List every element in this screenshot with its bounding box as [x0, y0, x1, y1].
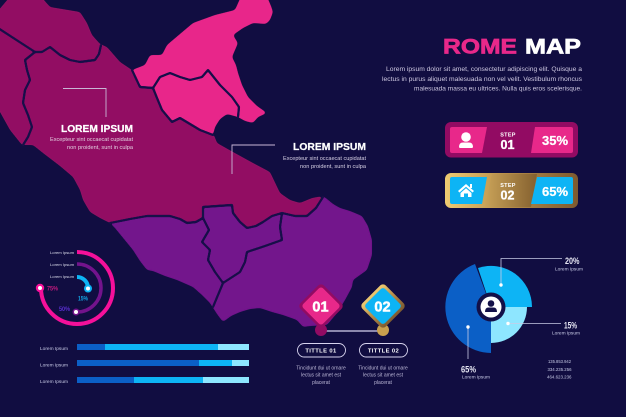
radial chart labels: 15%	[78, 296, 89, 302]
intro text: Lorem ipsum dolor sit amet, consectetur adipiscing elit. Quisque a	[386, 67, 583, 73]
icon: house	[458, 184, 474, 197]
pie label 20%	[499, 256, 583, 287]
marker 01: 01	[312, 300, 329, 316]
map area: magenta centre	[0, 0, 323, 228]
text under 02: lectus sit amet est	[363, 372, 404, 378]
text under 02: placerat	[374, 380, 393, 386]
step 1 value panel	[531, 127, 573, 153]
text under 01: lectus sit amet est	[301, 372, 342, 378]
callout 1 text: Excepteur sint occaecat cupidatat	[50, 137, 134, 143]
figures list: 464.623.236	[547, 374, 572, 380]
callout 2 text: non proident, sunt in culpa	[300, 164, 366, 170]
pie label 15%: 15%	[564, 320, 577, 330]
step 2 icon panel	[450, 177, 487, 204]
radial chart labels: 75%	[47, 286, 59, 292]
intro text	[382, 67, 583, 92]
step 1 card	[445, 122, 578, 158]
text under 02	[358, 366, 408, 386]
text under 02: Tincidunt dui ut ornare	[358, 366, 408, 372]
title pill 02: TITTLE 02	[368, 348, 399, 354]
radial chart labels	[47, 250, 89, 313]
pie label 20%: 20%	[565, 256, 580, 266]
step 1 percent: 35%	[542, 133, 568, 148]
title pill 01	[298, 344, 346, 357]
title: ROME	[443, 36, 517, 58]
pie label 65%	[461, 325, 490, 380]
intro text: malesuada massa eu ultrices. Nulla quis eros scelerisque.	[414, 86, 582, 92]
radial progress chart	[36, 252, 113, 324]
bar row 3	[40, 377, 249, 385]
radial chart labels: Lorem Ipsum	[50, 274, 75, 279]
ring 50%	[77, 264, 101, 312]
bar row 2: Lorem Ipsum	[40, 362, 68, 368]
map area: purple south	[110, 196, 372, 327]
title pill 02	[360, 344, 408, 357]
marker 02: 02	[374, 300, 391, 316]
pie label 65%: 65%	[461, 364, 476, 374]
step 2 label: STEP	[500, 183, 516, 189]
figures list: 135.853.942	[548, 359, 571, 365]
callout 1 text: non proident, sunt in culpa	[67, 145, 133, 151]
callout 1	[50, 88, 134, 151]
callout 1 heading: LOREM IPSUM	[61, 124, 133, 135]
callout 2 text: Excepteur sint occaecat cupidatat	[283, 156, 367, 162]
ring 25%	[77, 277, 88, 288]
intro text: lectus in purus aliquet malesuada non vel velit. Vestibulum rhoncus	[382, 77, 582, 83]
map of Rome region	[0, 0, 372, 327]
figures list	[547, 359, 572, 380]
pie label 20%: Lorem Ipsum	[555, 266, 583, 272]
radial chart labels: 50%	[59, 307, 71, 313]
step 1 label: STEP	[500, 132, 516, 138]
step 2 percent: 65%	[542, 184, 568, 199]
map borders	[0, 26, 323, 307]
radial chart labels: Lorem Ipsum	[50, 250, 75, 255]
callout 2 heading: LOREM IPSUM	[293, 142, 366, 153]
step 1 icon panel	[450, 127, 487, 153]
text under 01: placerat	[312, 380, 331, 386]
step 2 middle panel	[485, 174, 537, 207]
callout 1 text	[50, 137, 134, 151]
marker 01	[298, 283, 344, 336]
pie label 15%: Lorem Ipsum	[552, 330, 580, 336]
title: MAP	[525, 36, 581, 58]
step 2 value panel	[531, 177, 573, 204]
bar row 1: Lorem Ipsum	[40, 346, 68, 352]
radial chart labels: Lorem Ipsum	[50, 262, 75, 267]
figures list: 334.235.256	[548, 367, 572, 373]
title	[443, 36, 581, 58]
connector line	[321, 330, 383, 332]
icon: user	[485, 300, 497, 312]
step 2 number: 02	[501, 188, 514, 202]
stacked bars	[40, 344, 249, 385]
marker 02	[360, 283, 406, 336]
pie chart	[445, 264, 532, 353]
callout 2	[232, 142, 367, 174]
step 2 card	[445, 173, 578, 208]
pie label 15%	[506, 320, 580, 336]
map area: pink north	[132, 0, 273, 135]
pie label 65%: Lorem Ipsum	[462, 374, 490, 380]
bar row 2	[40, 360, 249, 368]
bar row 3: Lorem Ipsum	[40, 379, 68, 385]
bar row 1	[40, 344, 249, 352]
text under 01	[296, 366, 346, 386]
step 1 number: 01	[501, 138, 514, 152]
icon: person	[459, 132, 473, 148]
title pill 01: TITTLE 01	[305, 348, 337, 354]
callout 2 text	[283, 156, 367, 170]
ring 75%	[41, 252, 113, 324]
text under 01: Tincidunt dui ut ornare	[296, 366, 346, 372]
